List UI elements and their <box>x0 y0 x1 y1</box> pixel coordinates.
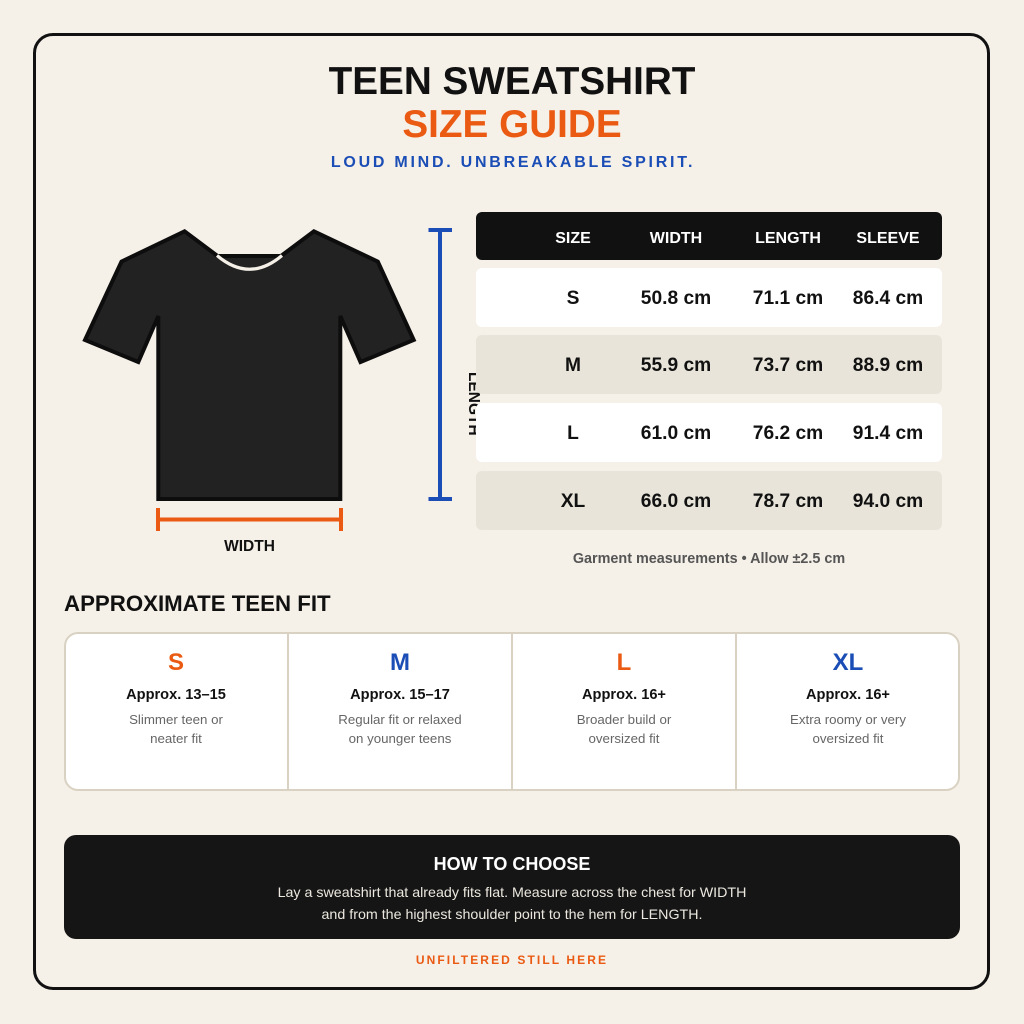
fit card L: oversized fit <box>589 731 659 746</box>
icon: collar <box>217 256 282 269</box>
fit card XL: Approx. 16+ <box>806 687 890 703</box>
title: teen sweatshirt: TEEN SWEATSHIRT <box>329 60 695 103</box>
row XL: XL <box>561 491 585 512</box>
panel: teen fit <box>64 632 960 791</box>
row XL: 94.0 cm <box>853 491 923 512</box>
row L: 76.2 cm <box>753 423 823 444</box>
row XL: 78.7 cm <box>753 491 823 512</box>
tagline: LOUD MIND. UNBREAKABLE SPIRIT. <box>331 154 695 171</box>
width label: WIDTH <box>224 538 275 555</box>
fit card L: Approx. 16+ <box>582 687 666 703</box>
row S: 71.1 cm <box>753 288 823 309</box>
table header: SLEEVE <box>856 230 920 247</box>
fit card S: Slimmer teen or <box>129 712 223 727</box>
row L: L <box>567 423 579 444</box>
row L <box>476 403 942 462</box>
fit card M <box>338 649 462 746</box>
shirt diagram <box>82 228 452 531</box>
row S: 86.4 cm <box>853 288 923 309</box>
fit card S <box>126 649 226 746</box>
row M: 73.7 cm <box>753 355 823 376</box>
row M <box>476 335 942 394</box>
fit card M: Regular fit or relaxed <box>338 712 462 727</box>
row L: 91.4 cm <box>853 423 923 444</box>
icon: shirt body <box>85 231 414 499</box>
fit card M: M <box>390 649 410 676</box>
section heading: APPROXIMATE TEEN FIT <box>64 591 331 616</box>
fit card L: L <box>617 649 631 676</box>
panel: how to choose <box>64 835 960 939</box>
table header: SIZE <box>555 230 591 247</box>
length label, partly covered by the table: LENGTH <box>465 372 482 436</box>
table header <box>476 212 942 260</box>
row XL: 66.0 cm <box>641 491 711 512</box>
fit card L: Broader build or <box>577 712 671 727</box>
row XL <box>476 471 942 530</box>
length arrow <box>428 230 452 499</box>
row M: M <box>565 355 581 376</box>
fit card M: on younger teens <box>349 731 451 746</box>
fit card S: Approx. 13–15 <box>126 687 226 703</box>
fit card M: Approx. 15–17 <box>350 687 450 703</box>
how to choose text <box>278 885 746 923</box>
fit card XL <box>790 649 906 746</box>
footer tagline: UNFILTERED STILL HERE <box>416 953 608 967</box>
row S <box>476 268 942 327</box>
size table <box>476 212 942 530</box>
title: size guide: SIZE GUIDE <box>402 103 622 146</box>
fit card S: neater fit <box>150 731 202 746</box>
fit card XL: XL <box>833 649 863 676</box>
row S: 50.8 cm <box>641 288 711 309</box>
table header: LENGTH <box>755 230 821 247</box>
how to choose text: Lay a sweatshirt that already fits flat. Measure across the chest for WIDTH <box>278 885 746 901</box>
row L: 61.0 cm <box>641 423 711 444</box>
table header: WIDTH <box>650 230 702 247</box>
fit card L <box>577 649 672 746</box>
fit card S: S <box>168 649 184 676</box>
row S: S <box>567 288 579 309</box>
row M: 88.9 cm <box>853 355 923 376</box>
fit card XL: oversized fit <box>813 731 883 746</box>
row M: 55.9 cm <box>641 355 711 376</box>
how to choose text: and from the highest shoulder point to the hem for LENGTH. <box>322 907 702 923</box>
width arrow <box>158 508 341 531</box>
how to choose heading: HOW TO CHOOSE <box>434 854 590 874</box>
table note: Garment measurements • Allow ±2.5 cm <box>573 551 845 567</box>
fit card XL: Extra roomy or very <box>790 712 906 727</box>
